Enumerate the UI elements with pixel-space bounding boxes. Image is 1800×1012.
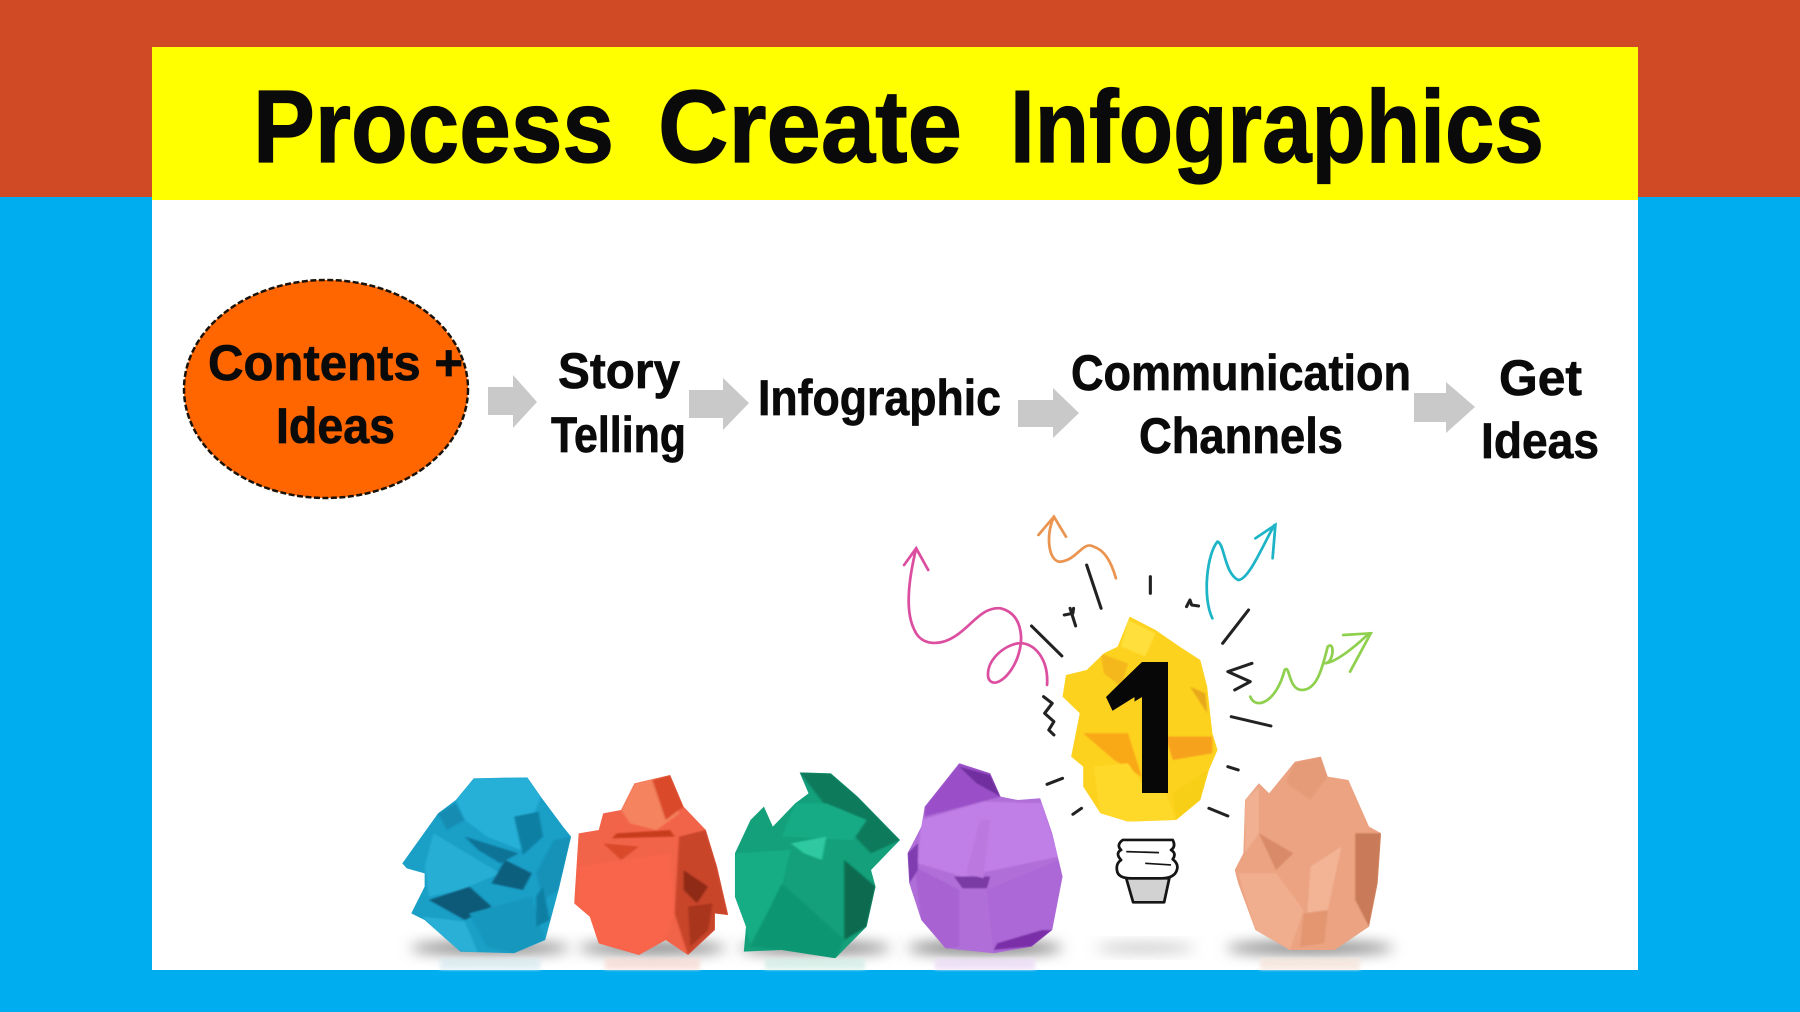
- step: Communication Channels: Communication: [1071, 345, 1411, 401]
- step: Get Ideas: Get: [1499, 350, 1582, 406]
- icon: salmon paper ball: [1231, 753, 1386, 953]
- title: Infographics: [1010, 69, 1544, 184]
- process flow: [184, 280, 1599, 498]
- step: Contents + Ideas: [184, 280, 468, 498]
- icon: black spark lines: [1032, 565, 1271, 816]
- step: Communication Channels: [1071, 345, 1411, 464]
- arrow 3: [1018, 388, 1079, 438]
- icon: green paper ball: [733, 770, 902, 960]
- arrow 4: [1414, 382, 1475, 433]
- step: Get Ideas: Ideas: [1481, 413, 1599, 469]
- step: Contents + Ideas: Ideas: [276, 398, 395, 454]
- step: Story Telling: [551, 343, 686, 463]
- icon: purple paper ball: [904, 760, 1066, 957]
- icon: yellow paper bulb: [1059, 613, 1221, 823]
- icon: blue paper ball: [398, 773, 576, 957]
- step: Story Telling: Telling: [551, 407, 686, 463]
- title: Create: [658, 69, 962, 184]
- arrow 1: [488, 375, 537, 428]
- background: top red band: [0, 0, 1800, 197]
- illustration: lightbulb group: [904, 517, 1386, 957]
- step: Story Telling: Story: [558, 343, 680, 399]
- title: Process: [253, 69, 614, 184]
- step: Contents + Ideas: Contents +: [208, 335, 463, 391]
- panel: yellow title banner: [152, 47, 1638, 200]
- panel: white content area: [152, 200, 1638, 970]
- arrow: orange doodle: [1038, 517, 1116, 578]
- number: big 1 on the bulb: 1: [1097, 622, 1203, 834]
- arrow: pink doodle: [904, 548, 1047, 685]
- step: Communication Channels: Channels: [1139, 408, 1343, 464]
- icon: bulb screw base: [1117, 840, 1177, 902]
- arrow 2: [689, 378, 749, 430]
- arrow: cyan doodle: [1207, 525, 1275, 618]
- title: [253, 69, 1544, 184]
- icon: red paper ball: [572, 773, 733, 957]
- arrow: green doodle: [1250, 633, 1371, 703]
- illustration: floor shadows and reflections: [410, 942, 1394, 970]
- step: Get Ideas: [1481, 350, 1599, 469]
- step: Infographic: Infographic: [758, 370, 1001, 426]
- illustration: four crumpled paper balls: [398, 770, 902, 960]
